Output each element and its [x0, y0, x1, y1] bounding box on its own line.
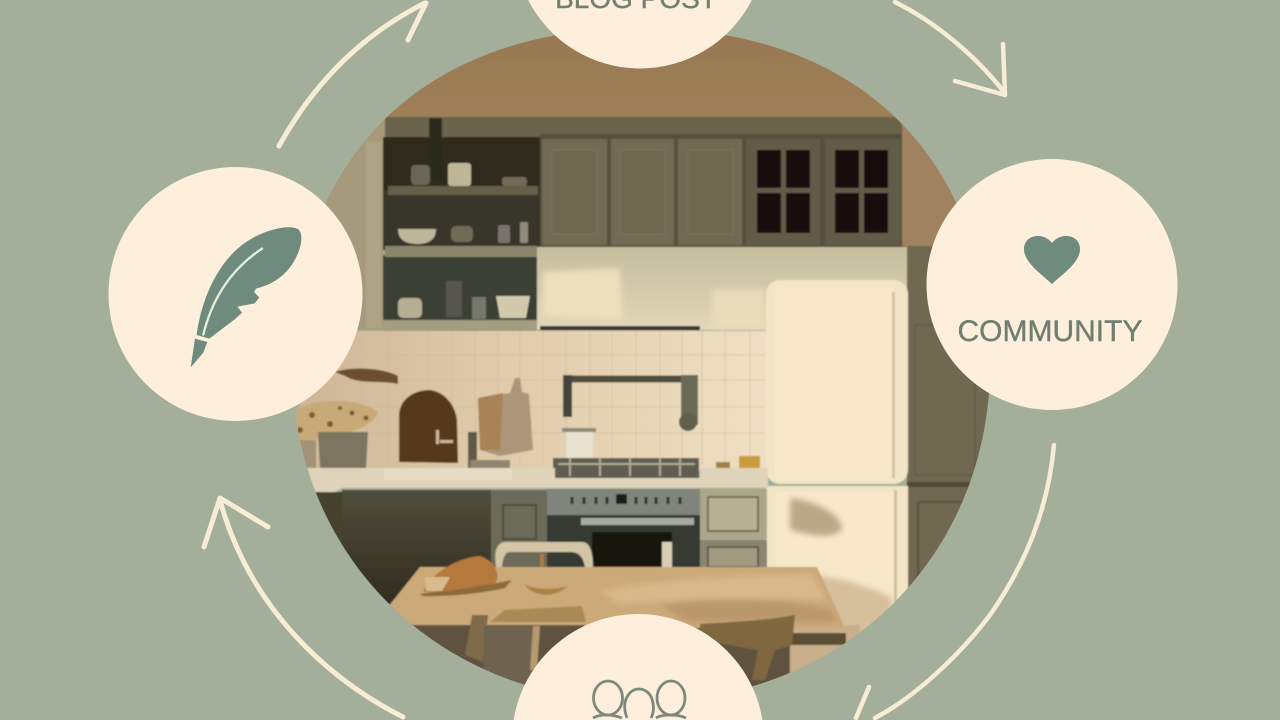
- cutting boards: [399, 390, 458, 463]
- wall: [386, 35, 908, 248]
- fridge: [766, 280, 908, 484]
- icon: heart: [1024, 236, 1080, 284]
- arrow: people to feather: [204, 498, 403, 717]
- label: community: COMMUNITY: [958, 315, 1142, 348]
- glass doors: [746, 139, 820, 245]
- faucet: [468, 432, 477, 468]
- upper cabinet doors: [540, 134, 906, 247]
- jars by the stove: [738, 455, 761, 469]
- arrow: blog post to community: [895, 2, 1005, 95]
- node: feather: [108, 167, 362, 421]
- icon: people: [593, 681, 686, 718]
- tall right cabinet: [907, 246, 997, 606]
- table: [388, 567, 843, 628]
- lower cabinets: [316, 491, 343, 546]
- chairs: [465, 615, 488, 662]
- wall right of glass: [901, 124, 934, 247]
- node: people: [514, 614, 762, 720]
- crown band: [385, 117, 907, 137]
- countertop: [307, 466, 769, 494]
- open shelves: [383, 137, 540, 192]
- dark floor area: [412, 624, 791, 686]
- shelf items: [448, 163, 471, 186]
- node: community: [926, 159, 1178, 410]
- bread board: [420, 580, 512, 596]
- arrow: community to people: [856, 445, 1054, 718]
- node: blog post: [528, 0, 752, 68]
- pot: [566, 432, 593, 459]
- hood: [537, 247, 907, 330]
- icon: feather: [191, 227, 301, 367]
- chair back: [495, 542, 593, 567]
- rack: [566, 376, 698, 382]
- backsplash: [300, 331, 770, 471]
- flowers and vase: [335, 369, 398, 384]
- side cabinet: [700, 489, 767, 539]
- oven: [547, 489, 700, 517]
- kitchen photo circle: [280, 20, 1000, 710]
- arrow: feather to blog post: [279, 3, 426, 146]
- stove: [553, 458, 699, 478]
- tall left cabinet: [300, 140, 383, 330]
